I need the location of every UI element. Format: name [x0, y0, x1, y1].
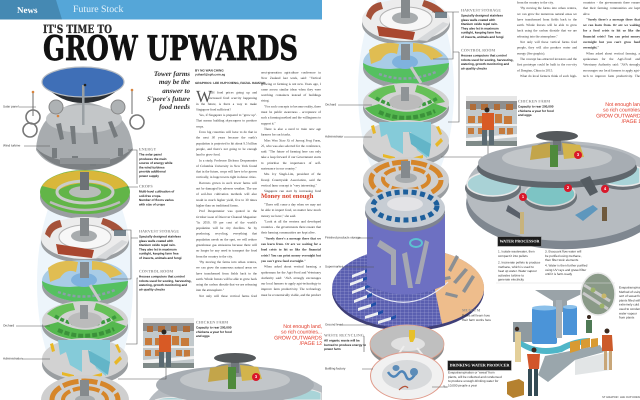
label: wind turbine: Wind turbine	[3, 144, 20, 148]
illustration: water processor disc, left page copy	[149, 353, 322, 400]
header bar: section tab	[0, 0, 322, 20]
callout: chicken farm, right page: and eggs	[518, 114, 532, 117]
steps: water processor right: using UV rays and gravel filter	[545, 268, 586, 272]
callout: control room: air quality checks	[139, 288, 165, 291]
callout: control room: watering, growth monitoring and	[139, 284, 187, 287]
article column 2 lower: "There will come a day when we may not be able to import food, no matter how much money we have," she said.	[261, 203, 321, 218]
byline	[195, 69, 266, 85]
standfirst: answer to	[162, 87, 190, 95]
red cross-reference, left page: /PAGE 12	[300, 340, 322, 346]
callout: museum	[462, 308, 491, 322]
callout: harvest storage: They also let in maximum	[139, 248, 177, 251]
section heading: money not enough: Money not enough	[261, 193, 313, 200]
callout: harvest storage: sunlight, keeping farm free	[139, 252, 179, 256]
step number 4: 4	[604, 186, 606, 191]
callout: energy: produces the main	[139, 157, 167, 161]
text: evapotranspiration note	[619, 286, 640, 320]
standfirst: may be the	[159, 78, 190, 86]
steps: water processor right: 4. Water is then further purified	[545, 264, 587, 268]
steps: water processor left: compact it into pellets	[498, 254, 528, 258]
callout: harvest storage	[139, 229, 182, 260]
heading: drinking water producer: DRINKING WATER PRODUCER	[450, 363, 509, 368]
callout: harvest storage, right page: HARVEST STORAGE	[461, 8, 501, 12]
floor: control room	[42, 260, 128, 307]
floor: waste recycling	[370, 325, 444, 367]
leader line: drinking water	[432, 385, 448, 387]
text: evapotranspiration note: from plants	[619, 316, 634, 320]
standfirst: Tower farms	[154, 70, 190, 78]
callout: chicken farm, right page	[518, 99, 554, 117]
illustration: drinking water producer plant	[507, 273, 615, 398]
callout: harvest storage, right page: glass walls coated with	[461, 18, 495, 22]
illustration: right tower farm	[332, 0, 484, 400]
callout: control room	[139, 269, 192, 292]
callout: crops: CROPS	[139, 184, 153, 188]
tab label: News: News	[17, 5, 38, 15]
article column 2 lower: "Surely there's a message there that we can learn from. Or are we waiting for a food crisis to hit us like the financial crisis? You can print money overnight but you can't grow food overnight."	[261, 237, 321, 263]
callout: harvest storage, right page: They also let in maximum	[461, 27, 499, 30]
callout: energy: the wind turbines	[139, 166, 165, 169]
label: supermarket: Supermarket	[325, 265, 343, 268]
callout: energy: The solar panel	[139, 153, 162, 156]
callout: control room, right page: Houses computers that control	[461, 54, 507, 58]
text: drinking water producer: to produce enough drinking water for	[448, 380, 498, 383]
glass shell	[358, 0, 454, 202]
red cross-reference, right page	[596, 101, 640, 124]
red cross-reference, left page: so rich countries...	[281, 329, 322, 335]
callout: harvest storage: titanium oxide repel rain.	[139, 244, 176, 247]
steps: water processor right: 3. Evacuant flow water will	[545, 250, 581, 254]
leader lines: right tower	[338, 12, 488, 369]
callout: crops: soil-free crops.	[139, 194, 161, 198]
floor: orchard	[363, 83, 449, 128]
heading: water processor	[498, 237, 541, 246]
label: solar panel: Solar panel	[3, 105, 19, 108]
callout: control room, right page	[461, 48, 514, 70]
label: bottling factory: Bottling factory	[325, 367, 345, 370]
callout: museum: Public will learn how	[462, 314, 490, 318]
callout: energy: provide additional	[139, 170, 166, 174]
headline: IT'S TIME TO	[43, 22, 112, 36]
red cross-reference, left page: Not enough land,	[283, 323, 322, 329]
callout: chicken farm: chickens a year for food	[196, 330, 232, 334]
callout: crops: with size of crops	[139, 203, 165, 206]
callout: chicken farm: CHICKEN FARM	[196, 320, 228, 324]
article column 1: "By moving the farms into urban centres, we can grow the numerous natural areas we have transformed from fields back to the earth. Whole forests will be able to grow back using the carbon dioxide that we are releasing into the atmosphere."	[196, 260, 257, 292]
steps: water processor right: then filter toxic elements	[545, 259, 578, 262]
step number 3: 3	[577, 152, 579, 157]
steps: water processor left: activates turbine to	[498, 274, 524, 277]
byline: GRAPHICS: LEE HUP KHENG, FAIZAL HAMZAH	[195, 81, 265, 85]
callout: control room, right page: air quality checks	[461, 67, 487, 70]
steps: water processor left: methane, which is used to	[498, 265, 534, 269]
callout: crops: Multi-level cultivation of	[139, 190, 174, 194]
floor: control room	[363, 42, 449, 89]
steps: water processor left	[498, 250, 540, 282]
floor: orange crop tier	[41, 375, 129, 400]
callout: waste recycling: All organic waste will be	[324, 339, 360, 342]
glass shell around floors	[37, 167, 133, 399]
callout: chicken farm	[196, 320, 232, 338]
purple cylinder: finished products storage	[367, 214, 445, 294]
callout: harvest storage, right page	[461, 8, 504, 39]
steps: water processor left: heat up water. Water vapour	[498, 270, 537, 273]
callout: control room: CONTROL ROOM	[139, 269, 173, 274]
label: finished products storage: Finished products storage	[325, 236, 361, 240]
callout: crops	[139, 184, 174, 206]
article column 2 upper: "For such concepts to become reality, there must be public awareness - acceptance of such a farming method and the willingness to support it."	[261, 105, 321, 125]
article column 1: Even big countries will have to do that in the next 30 years because the earth's population is projected to hit about 9.5 billion people, and there's not going to be enough land to grow food.	[196, 131, 257, 157]
article column 1: ITH food prices going up and increased food scarcity happening in the future, is there a way to make Singapore food sufficient?	[196, 91, 257, 111]
floor: orange crop tier	[363, 157, 449, 208]
article column 2 lower: "Look at all the western and developed countries - the governments there ensure that their farming communities are kept alive.	[261, 220, 321, 235]
steps: water processor right	[545, 250, 588, 276]
article column 2 upper: Mrs Ivy Singh-Lim, president of the Kranji Countryside Association, said the vertical farm concept is "very interesting."	[261, 173, 321, 187]
callout: waste recycling	[324, 333, 366, 351]
article column 2 upper: There is also a need to train new age farmers for such tasks.	[261, 127, 321, 137]
callout: control room: Houses computers that control	[139, 275, 185, 278]
article column 1: In a study, Professor Dickson Despommier of Columbia University in New York found that in the future, crops will have to be grown vertically, in huge towers tight in dense cities.	[196, 159, 257, 179]
callout: waste recycling: burned to produce energy to	[324, 343, 366, 347]
divider: water steps	[496, 282, 615, 284]
label: administrator: Administrator	[325, 135, 343, 138]
text: drinking water producer: Evapotranspiration or 'sweat' from	[448, 371, 495, 374]
article column 1	[196, 91, 257, 300]
callout: crops: Number of floors varies	[139, 199, 174, 202]
article column 2 lower	[261, 203, 321, 297]
steps: water processor right: be purified using methane,	[545, 254, 581, 258]
callout: energy: power supply	[139, 174, 159, 178]
article column 3, right page	[517, 1, 577, 78]
callout: harvest storage, right page: titanium oxide repel rain.	[461, 23, 498, 26]
callout: waste recycling: power farm	[324, 348, 341, 351]
solar dish	[42, 67, 124, 125]
red cross-reference, left page	[274, 323, 322, 346]
heading: water processor: WATER PROCESSOR	[500, 239, 539, 244]
callout: control room, right page: CONTROL ROOM	[461, 48, 495, 52]
callout: harvest storage, right page: of insects, animals and fungi	[461, 35, 503, 39]
callout: chicken farm: and eggs	[196, 335, 210, 338]
callout: energy: ENERGY	[139, 147, 156, 152]
article column 1: Prof Despommier was quoted in the October issue of Discover Channel Magazine: "In 2050, 80 per cent of the world's population will be city dwellers. So by producing, recycling, everything that population needs on the spot, we will reduce greenhouse gas emissions because there will no longer be any need to transport the food from the country to the city.	[196, 210, 257, 258]
floor: harvest storage	[41, 217, 129, 263]
text: drinking water producer	[448, 371, 502, 388]
article column 3, right page: The concept has attracted investors and the first prototype could be built in the eco-city of Dongtan, China in 2015.	[517, 57, 577, 72]
steps: water processor left: 1. Isolate wastewater, then	[498, 250, 535, 254]
label: orchard: Orchard	[3, 324, 14, 328]
callout: harvest storage: of insects, animals and fungi	[139, 256, 181, 260]
article column 3, right page: "By moving the farms into urban centres, we can grow the numerous natural areas we have transformed from fields back to the earth. Whole forests will be able to grow back using the carbon dioxide that we are releasing into the atmosphere."	[517, 7, 577, 38]
callout: chicken farm: Capacity to rear 200,000	[196, 326, 231, 330]
steps: water processor left: generate electricity	[498, 278, 524, 282]
illustration: left tower farm	[23, 67, 144, 400]
steps: water processor left: 2. Incinerate pellets to produce	[498, 261, 540, 264]
label: administration: Administration	[3, 357, 23, 360]
heading: drinking water producer	[448, 361, 511, 370]
illustration: water processor disc with numbered steps	[465, 131, 640, 249]
ground disc: supermarket	[332, 248, 484, 331]
callout: energy	[139, 147, 173, 178]
steps: water processor right: until it is farm-ready	[545, 273, 572, 276]
callout: harvest storage: Specially designed stainless	[139, 235, 181, 238]
standfirst	[147, 70, 190, 111]
floor: orchard	[42, 301, 128, 346]
standfirst: food needs	[159, 103, 190, 111]
illustration: chicken farm inset, right page	[466, 96, 517, 146]
callout: chicken farm, right page: Capacity to rear 200,000	[518, 105, 553, 108]
article column 4, right page: "Surely there's a message there that we can learn from. Or are we waiting for a food crisis to hit us like the financial crisis? You can print money overnight but you can't grow food overnight."	[583, 18, 640, 50]
step number 2: 2	[567, 186, 569, 190]
article column 1: Harvests grown in such tower farms will not be damaged by adverse weather. The use of soil-free cultivation methods will also result in much higher yield, five to 30 times higher than on traditional farms.	[196, 181, 257, 207]
callout: control room, right page: robots used for sowing, harvesting,	[461, 58, 513, 62]
drop cap: W	[196, 87, 212, 106]
callout: waste recycling: WASTE RECYCLING	[324, 333, 364, 338]
standfirst: S'pore's future	[147, 95, 190, 103]
tab label: Future Stock: Future Stock	[73, 4, 123, 15]
callout: chicken farm, right page: CHICKEN FARM	[518, 99, 550, 104]
red cross-reference, left page: GROW OUTWARDS	[274, 334, 322, 340]
step number 1: 1	[522, 194, 524, 199]
callout: chicken farm, right page: chickens a year for food	[518, 109, 554, 113]
article column 2 upper	[261, 71, 321, 193]
floor: administration	[42, 338, 128, 385]
drum floor: blue racks	[365, 188, 445, 232]
label: ground level: Ground level	[325, 323, 343, 326]
callout: museum: MUSEUM	[462, 308, 480, 312]
dome: energy level	[23, 89, 144, 170]
article column 3, right page: from the country to the city.	[517, 1, 554, 4]
floor: bottling factory	[370, 352, 444, 400]
callout: energy: source of energy while	[139, 162, 173, 165]
floor: crops	[40, 170, 130, 219]
label: orchard, right tower: Orchard	[325, 103, 336, 106]
floor: administration	[363, 120, 449, 167]
callout: control room, right page: watering, growth monitoring and	[461, 63, 509, 66]
byline: BY NG WAN CHING	[195, 69, 224, 72]
text: evapotranspiration note: water vapour	[619, 312, 637, 315]
article column 4, right page	[583, 1, 640, 78]
callout: harvest storage, right page: Specially designed stainless	[461, 14, 503, 18]
article column 4, right page: countries - the governments there ensure that their farming communities are kept alive.	[583, 1, 640, 16]
byline: yuhanl@sph.com.sg	[195, 73, 225, 77]
callout: harvest storage, right page: sunlight, keeping farm free	[461, 31, 501, 35]
callout: museum: their farm works here	[462, 318, 491, 322]
article column 3, right page: Not only will these vertical farms feed people, they will also produce water and energy (See graphic).	[517, 41, 577, 55]
floor: harvest storage	[362, 0, 450, 45]
illustration: chicken farm inset, left page	[143, 318, 194, 368]
leader lines: left tower	[16, 107, 166, 379]
callout: harvest storage: glass walls coated with	[139, 239, 173, 243]
article column 1: Yes, if Singapore is prepared to "grow up". That means building skyscrapers to produce crops.	[196, 114, 257, 128]
step number 3, left copy: 3	[255, 374, 257, 379]
article column 2 upper: next-generation agriculture conference in New Zealand last week, said: "Vertical growing or farming is not new. Years ago, I came across similar ideas when they were watching containers instead of buildings rising.	[261, 71, 321, 103]
callout: control room: robots used for sowing, harvesting,	[139, 279, 191, 283]
callout: harvest storage: HARVEST STORAGE	[139, 229, 179, 234]
article column 2 upper: Miss Wan Xiao Xi of Jurong Frog Farm, 25, who was also selected for the conference, said: "The future of farming here can only take a leap forward if our Government starts to prioritise the importance of self-sustenance in our country."	[261, 139, 321, 171]
text: drinking water producer: plants, will be collected and condensed	[448, 375, 502, 379]
text: drinking water producer: 10,000 people a year	[448, 384, 477, 387]
